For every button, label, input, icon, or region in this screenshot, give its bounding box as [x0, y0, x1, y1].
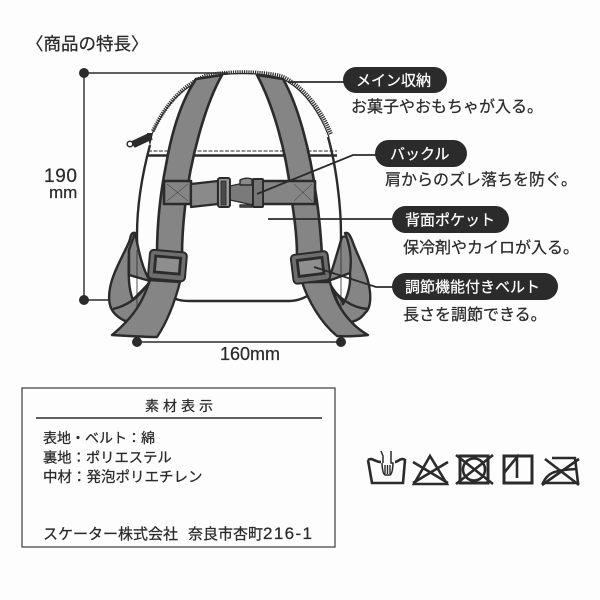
- icon: hand wash: [368, 451, 405, 483]
- backpack illustration: [109, 72, 370, 342]
- icon: no bleach: [413, 456, 448, 484]
- callout: adjustable belt: 調節機能付きベルト: [405, 279, 540, 296]
- width dimension: 160mm: [220, 344, 280, 364]
- maker address: 216-1: [263, 524, 312, 543]
- left shoulder strap: [157, 75, 222, 255]
- icon: line dry: [504, 456, 532, 483]
- material lines: 裏地：ポリエステル: [43, 450, 172, 466]
- zipper pull: [127, 133, 153, 147]
- material lines: 表地・ベルト：綿: [43, 430, 155, 446]
- right lower strap: [302, 282, 368, 336]
- maker address: スケーター株式会社: [43, 526, 178, 543]
- right shoulder strap: [257, 75, 322, 255]
- right adjuster buckle: [290, 251, 331, 284]
- callout: buckle: 肩からのズレ落ちを防ぐ。: [385, 171, 577, 189]
- maker address: 奈良市杏町: [188, 526, 263, 543]
- chest strap and buckle: [164, 178, 315, 207]
- callout: back pocket: 背面ポケット: [405, 212, 495, 229]
- icon: no iron: [542, 458, 579, 485]
- callout: main compartment: お菓子やおもちゃが入る。: [351, 98, 543, 116]
- material lines: 中材：発泡ポリエチレン: [43, 469, 202, 486]
- left lower strap: [112, 280, 180, 337]
- callout: back pocket: 保冷剤やカイロが入る。: [403, 239, 579, 257]
- vertical width guides: [137, 230, 341, 342]
- heading: 〈商品の特長〉: [26, 34, 148, 54]
- seam lines: [148, 151, 337, 156]
- care icons: [368, 451, 579, 485]
- maker address: [43, 524, 312, 543]
- width dimension: [132, 337, 346, 364]
- callout: buckle: バックル: [390, 146, 450, 163]
- height dimension: mm: [49, 183, 77, 202]
- zipper: [152, 72, 331, 137]
- materials title: 素材表示: [145, 398, 217, 414]
- callout: main compartment: [288, 67, 543, 116]
- callout: adjustable belt: [314, 267, 558, 324]
- right back wing: [328, 233, 370, 322]
- callout: back pocket: [268, 206, 579, 257]
- material lines: [43, 430, 202, 486]
- height dimension: [44, 68, 228, 305]
- icon: no tumble dry: [456, 455, 493, 484]
- left back wing: [109, 233, 150, 321]
- callout: adjustable belt: 長さを調節できる。: [403, 306, 547, 324]
- height dimension: 190: [44, 166, 77, 187]
- body outline: [137, 137, 341, 301]
- left adjuster buckle: [148, 249, 187, 282]
- panel: materials: [22, 388, 335, 547]
- callout: main compartment: メイン収納: [356, 72, 431, 90]
- callout: buckle: [257, 140, 577, 194]
